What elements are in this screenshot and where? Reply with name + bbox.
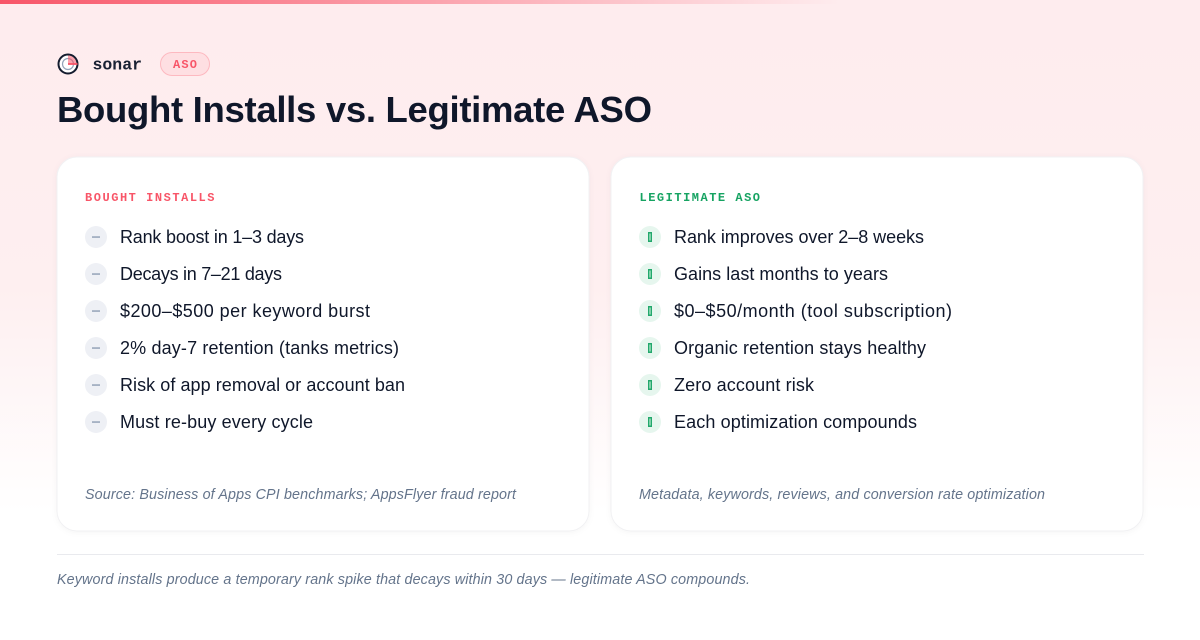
- item: cost: $200–$500 per keyword burst: [120, 301, 370, 321]
- list: bought installs: [85, 226, 405, 433]
- panel heading: legitimate ASO: LEGITIMATE ASO: [640, 191, 760, 205]
- panel: legitimate ASO: [611, 157, 1143, 531]
- header: logo and badge: [58, 52, 210, 76]
- scope note: Metadata, keywords, reviews, and conversion rate optimization: [639, 487, 1045, 503]
- item: zero risk: Zero account risk: [674, 375, 815, 395]
- item: re-buy: Must re-buy every cycle: [120, 412, 313, 432]
- brand name: sonar: [92, 56, 142, 74]
- item: compounds: Each optimization compounds: [674, 412, 917, 432]
- item: gains last: Gains last months to years: [674, 264, 888, 284]
- badge: ASO: ASO: [173, 58, 197, 72]
- item: cost: $0–$50/month (tool subscription): [674, 301, 952, 321]
- top accent bar: [0, 0, 840, 4]
- item: retention: Organic retention stays healthy: [674, 338, 926, 358]
- item: decays: Decays in 7–21 days: [120, 264, 282, 284]
- item: rank boost: Rank boost in 1–3 days: [120, 227, 304, 247]
- icon: sonar logo: [58, 54, 78, 74]
- item: rank improves: Rank improves over 2–8 weeks: [674, 227, 924, 247]
- footer note: Keyword installs produce a temporary rank spike that decays within 30 days — legitimate ASO compounds.: [57, 572, 750, 588]
- title: Bought Installs vs. Legitimate ASO: [57, 89, 652, 130]
- list: legitimate ASO: [639, 226, 952, 433]
- item: risk: Risk of app removal or account ban: [120, 375, 405, 395]
- source note: Source: Business of Apps CPI benchmarks; AppsFlyer fraud report: [85, 487, 517, 503]
- panel heading: bought installs: BOUGHT INSTALLS: [85, 191, 214, 205]
- badge: ASO: [160, 52, 210, 76]
- item: retention: 2% day-7 retention (tanks metrics): [120, 338, 399, 358]
- panel: bought installs: [57, 157, 589, 531]
